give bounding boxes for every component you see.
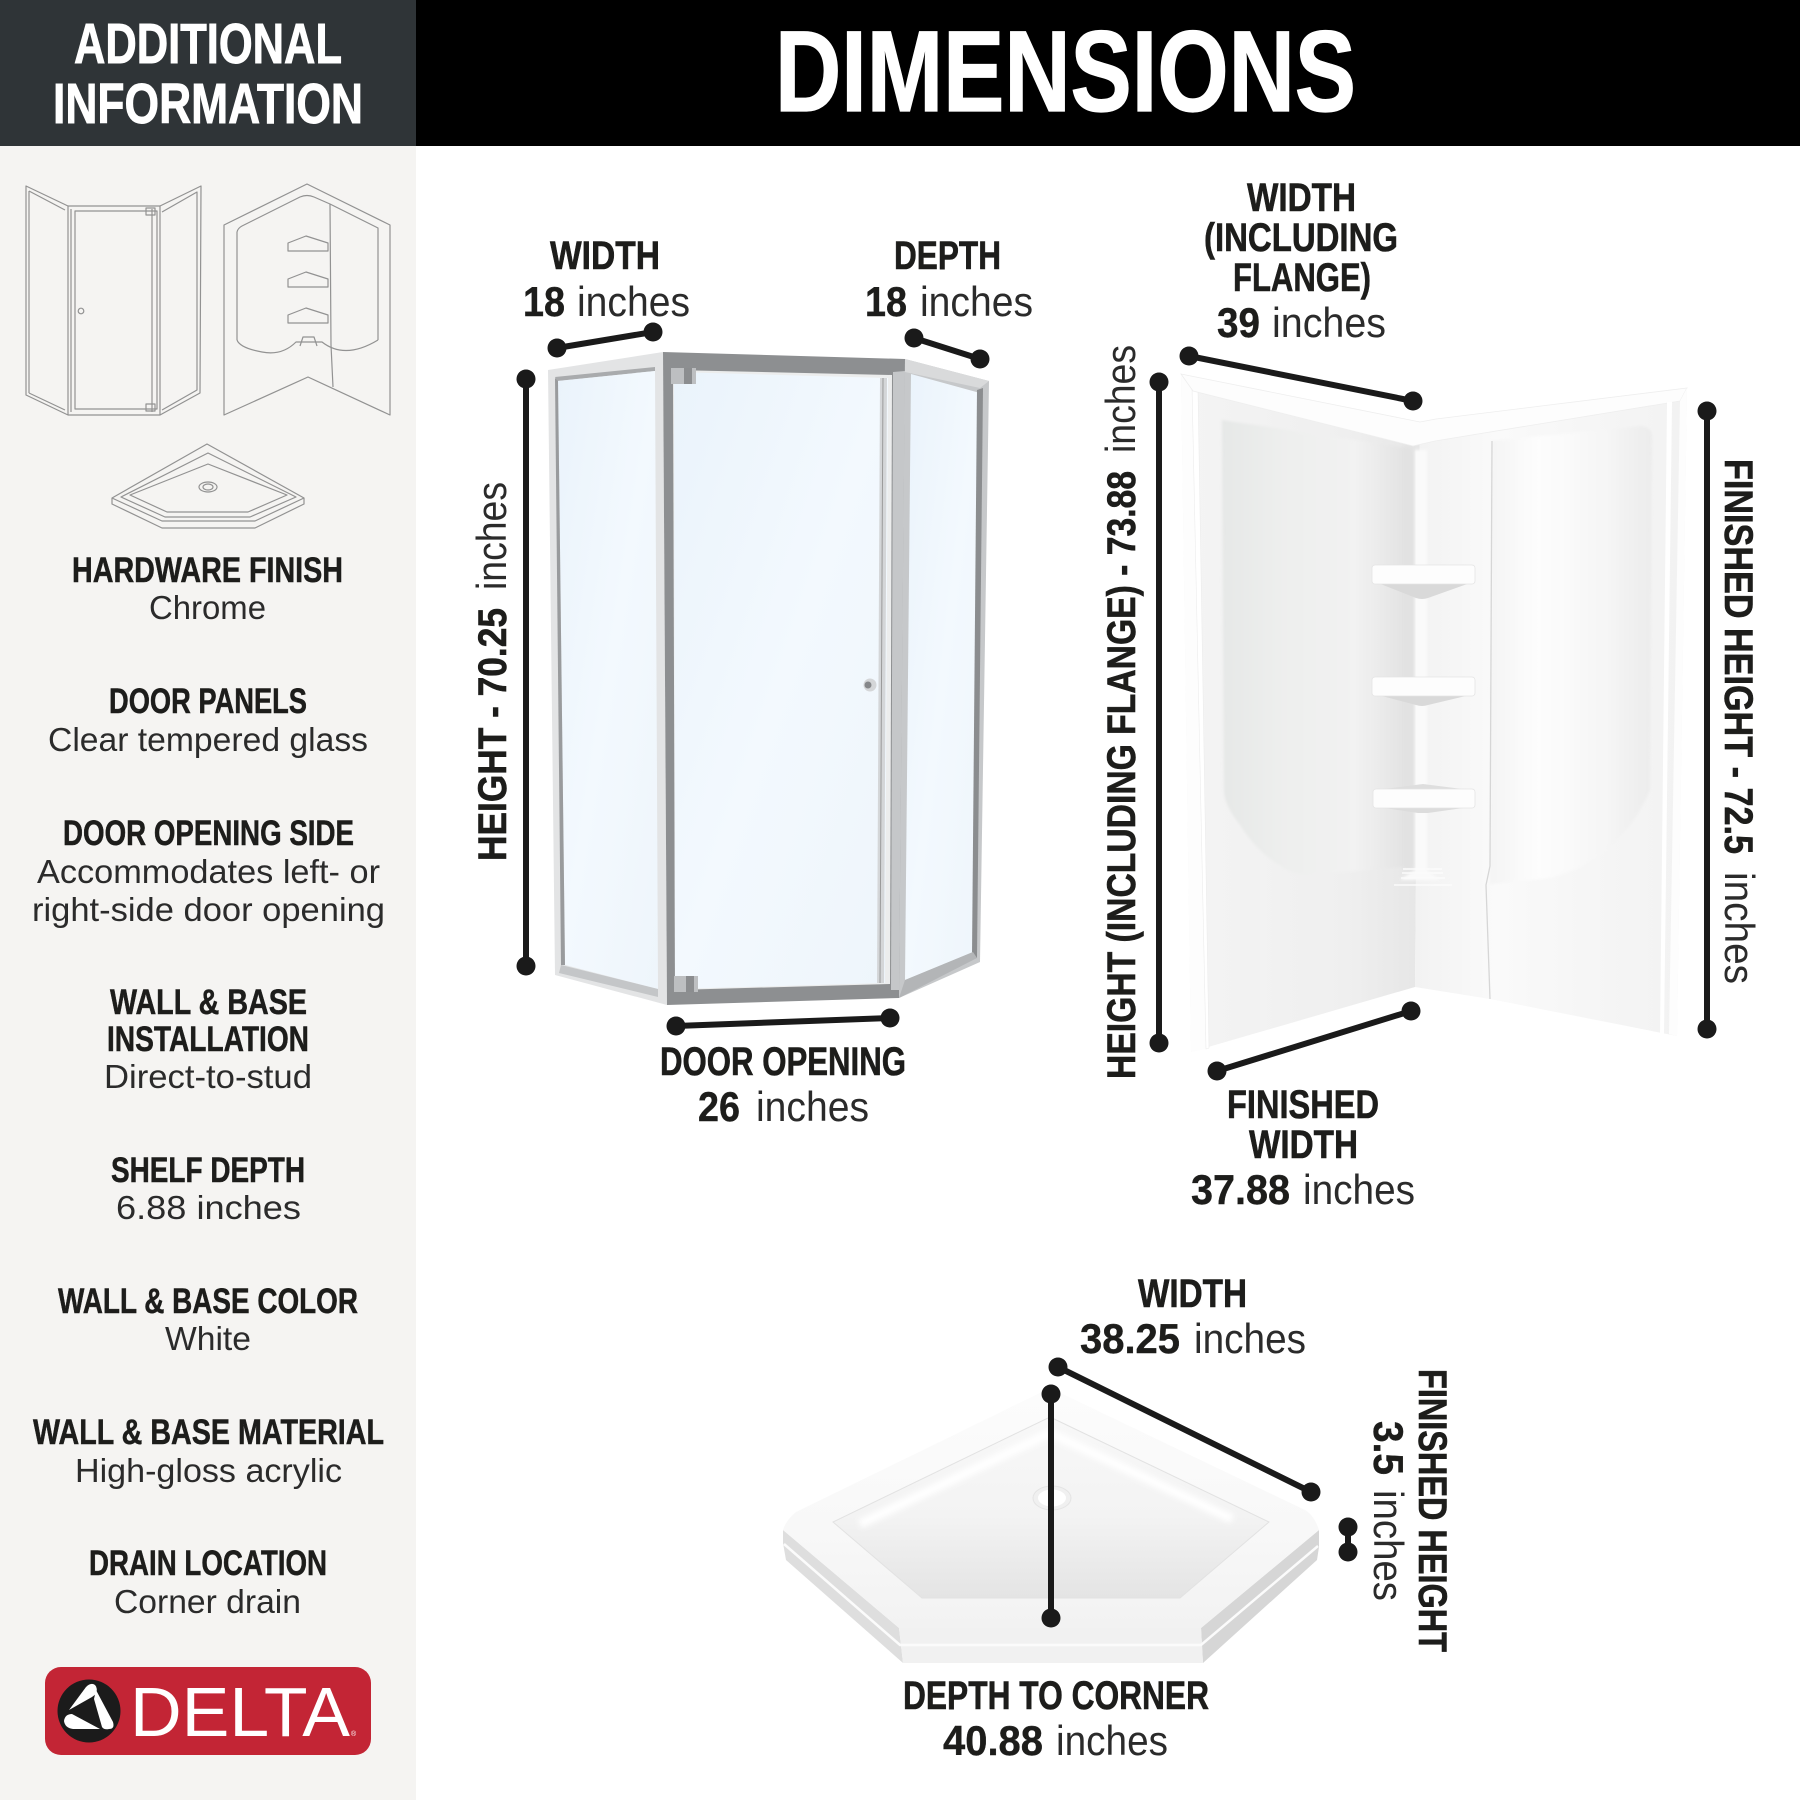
spec: shelf depth: 6.88 inches bbox=[116, 1189, 301, 1226]
spec: door opening side: Accommodates left- or bbox=[37, 853, 380, 890]
spec: drain location: Corner drain bbox=[114, 1583, 301, 1620]
right glass panel bbox=[899, 359, 989, 998]
spec: hardware finish: HARDWARE FINISH bbox=[72, 551, 343, 590]
label: wall width including flange: (INCLUDING bbox=[1204, 216, 1398, 260]
spec: wall and base installation: INSTALLATION bbox=[107, 1020, 309, 1059]
label: wall height including flange: HEIGHT (INCLUDING FLANGE) - 73.88 bbox=[1100, 471, 1144, 1079]
dimension: door width line bbox=[548, 322, 662, 358]
label: depth to corner: DEPTH TO CORNER bbox=[903, 1674, 1209, 1718]
left wall bbox=[1181, 374, 1420, 1052]
label: door width bbox=[523, 234, 690, 325]
spec: door opening side: right-side door opening bbox=[32, 891, 385, 928]
dimension: base height line bbox=[1338, 1518, 1358, 1562]
spec: wall and base color bbox=[58, 1282, 358, 1357]
label: door width: WIDTH bbox=[550, 234, 660, 278]
spec: shelf depth bbox=[111, 1151, 305, 1226]
spec: door panels: DOOR PANELS bbox=[109, 682, 307, 721]
shower door illustration bbox=[548, 352, 989, 1005]
logo: delta bbox=[45, 1667, 371, 1755]
line drawing: shower base bbox=[112, 444, 304, 528]
label: wall width including flange: FLANGE) bbox=[1233, 256, 1371, 300]
spec: drain location: DRAIN LOCATION bbox=[89, 1544, 327, 1583]
spec: door opening side: DOOR OPENING SIDE bbox=[63, 814, 354, 853]
title: dimensions bbox=[416, 0, 1800, 146]
dimension: base width line bbox=[1048, 1358, 1320, 1502]
spec: drain location bbox=[89, 1544, 327, 1620]
label: base finished height: 3.5 bbox=[1365, 1421, 1412, 1475]
logo: delta: DELTA bbox=[130, 1673, 350, 1751]
spec: door opening side bbox=[32, 814, 385, 928]
wall set illustration bbox=[1181, 374, 1687, 1052]
left glass panel bbox=[548, 352, 667, 1005]
label: base finished height bbox=[1365, 1369, 1454, 1652]
base right side bbox=[1201, 1530, 1319, 1663]
logo: delta: ® bbox=[351, 1730, 357, 1738]
basin highlight bbox=[860, 1433, 1232, 1524]
spec: shelf depth: SHELF DEPTH bbox=[111, 1151, 305, 1190]
dimension: finished height line bbox=[1698, 402, 1716, 1038]
basin bbox=[833, 1417, 1269, 1598]
spec: door panels: Clear tempered glass bbox=[48, 721, 368, 758]
label: finished width: inches bbox=[1303, 1166, 1415, 1213]
spec: wall and base material: WALL & BASE MATERIAL bbox=[33, 1413, 384, 1452]
line drawing: wall set bbox=[224, 184, 390, 415]
label: door width: 18 bbox=[523, 278, 565, 325]
door hinges bbox=[671, 368, 698, 992]
left recess bbox=[1222, 420, 1413, 876]
label: door opening: inches bbox=[756, 1083, 869, 1130]
label: door opening: 26 bbox=[698, 1083, 740, 1130]
door knob bbox=[864, 678, 876, 692]
shelves bbox=[1372, 565, 1475, 813]
label: wall width including flange bbox=[1204, 176, 1398, 346]
base front bbox=[899, 1628, 1203, 1663]
spec: wall and base color: WALL & BASE COLOR bbox=[58, 1282, 358, 1321]
dimension: door opening line bbox=[666, 1008, 900, 1036]
base top rim bbox=[783, 1388, 1319, 1628]
dimension: door depth line bbox=[904, 328, 990, 368]
spec: hardware finish: Chrome bbox=[149, 589, 266, 626]
label: door opening bbox=[660, 1040, 906, 1130]
sidebar heading: additional information: ADDITIONAL bbox=[74, 12, 342, 76]
label: finished height: inches bbox=[1716, 872, 1763, 984]
label: base width: inches bbox=[1194, 1315, 1306, 1362]
dimension: base depth line bbox=[1042, 1384, 1060, 1628]
sidebar background bbox=[0, 146, 416, 1800]
label: door opening: DOOR OPENING bbox=[660, 1040, 906, 1084]
label: base width bbox=[1080, 1272, 1306, 1362]
spec: wall and base installation: Direct-to-stud bbox=[104, 1058, 312, 1095]
label: depth to corner bbox=[903, 1674, 1209, 1764]
label: finished height: FINISHED HEIGHT - 72.5 bbox=[1716, 459, 1760, 854]
label: door depth bbox=[865, 234, 1033, 325]
spec: wall and base material: High-gloss acrylic bbox=[75, 1452, 342, 1489]
drain bbox=[1033, 1486, 1071, 1510]
label: door depth: 18 bbox=[865, 278, 907, 325]
spec: wall and base installation bbox=[104, 983, 312, 1095]
label: wall height including flange: inches bbox=[1097, 345, 1144, 453]
seam bbox=[1486, 441, 1492, 999]
spec: wall and base installation: WALL & BASE bbox=[110, 983, 307, 1022]
dimension: finished width line bbox=[1208, 1002, 1420, 1080]
label: finished width: 37.88 bbox=[1191, 1166, 1290, 1213]
label: finished width: WIDTH bbox=[1249, 1123, 1358, 1167]
label: base finished height: inches bbox=[1365, 1490, 1412, 1601]
dimension: door height line bbox=[516, 370, 536, 976]
soap dish bbox=[1394, 869, 1452, 885]
sidebar heading: additional information: INFORMATION bbox=[53, 72, 363, 136]
flanges bbox=[1181, 374, 1687, 1052]
label: finished width: FINISHED bbox=[1227, 1083, 1379, 1127]
spec: door panels bbox=[48, 682, 368, 758]
shower base illustration bbox=[783, 1388, 1319, 1663]
label: door depth: DEPTH bbox=[894, 234, 1001, 278]
label: base finished height: FINISHED HEIGHT bbox=[1410, 1369, 1454, 1652]
line drawing: shower door bbox=[26, 186, 201, 415]
spec: wall and base material bbox=[33, 1413, 384, 1489]
label: depth to corner: 40.88 bbox=[943, 1717, 1043, 1764]
right wall bbox=[1415, 388, 1687, 1036]
label: door width: inches bbox=[577, 278, 690, 325]
right recess bbox=[1490, 426, 1652, 884]
sidebar heading: additional information bbox=[0, 0, 416, 146]
label: door depth: inches bbox=[920, 278, 1033, 325]
dimension: wall height line bbox=[1150, 372, 1168, 1052]
label: wall width including flange: inches bbox=[1272, 299, 1386, 346]
groove bbox=[784, 1544, 1318, 1645]
label: door height: inches bbox=[468, 482, 515, 590]
label: wall width including flange: WIDTH bbox=[1247, 176, 1356, 220]
spec: wall and base color: White bbox=[165, 1320, 251, 1357]
label: finished width bbox=[1191, 1083, 1415, 1213]
dimension: wall width line bbox=[1180, 346, 1422, 410]
title: dimensions: DIMENSIONS bbox=[775, 8, 1356, 136]
corner column bbox=[1400, 445, 1440, 880]
label: base width: 38.25 bbox=[1080, 1315, 1180, 1362]
base left side bbox=[783, 1530, 903, 1663]
spec: hardware finish bbox=[72, 551, 343, 626]
label: door height: HEIGHT - 70.25 bbox=[471, 608, 515, 861]
label: depth to corner: inches bbox=[1056, 1717, 1168, 1764]
label: base width: WIDTH bbox=[1138, 1272, 1247, 1316]
label: wall width including flange: 39 bbox=[1217, 299, 1260, 346]
door frame bbox=[663, 352, 905, 1005]
